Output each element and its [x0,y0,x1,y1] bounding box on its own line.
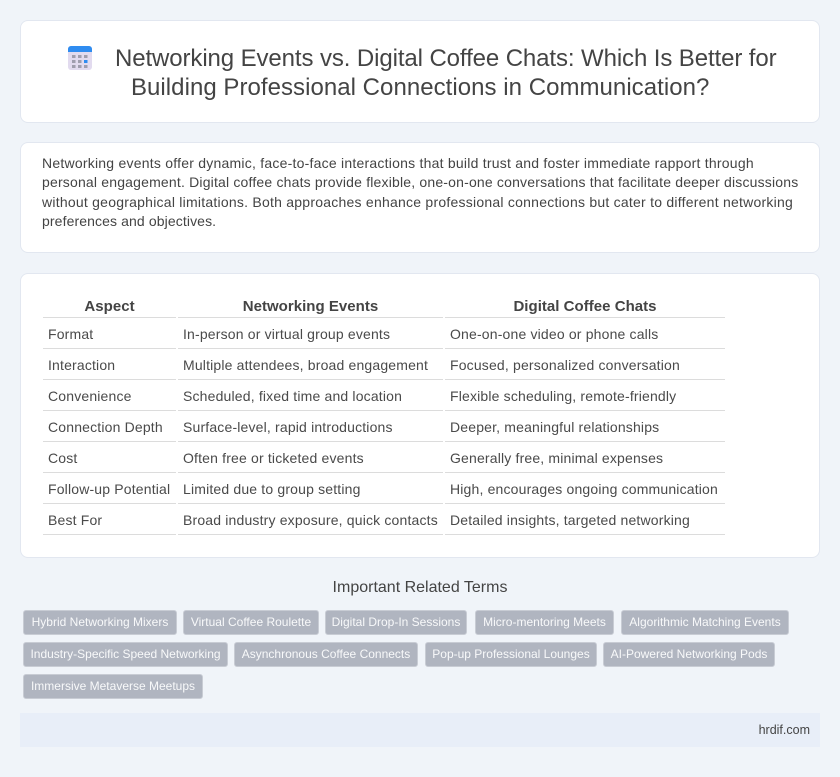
tags: related terms: AI-Powered Networking Pods [611,647,767,661]
title: Networking Events vs. Digital Coffee Chats: Which Is Better for [115,45,777,72]
row: follow-up potential: High, encourages ongoing communication [450,481,718,497]
panel: intro [20,142,820,253]
row: convenience: Scheduled, fixed time and location [183,388,402,404]
tags: related terms: Asynchronous Coffee Connects [242,647,410,661]
row: convenience: Flexible scheduling, remote-friendly [450,388,676,404]
table: comparison [43,298,725,535]
table header: Aspect [84,298,135,315]
row: interaction: Multiple attendees, broad engagement [183,357,428,373]
row: connection depth: Connection Depth [48,419,163,435]
row: format: One-on-one video or phone calls [450,326,658,342]
row: format: Format [48,326,93,342]
tags: related terms: Hybrid Networking Mixers [32,615,168,629]
tags: related terms: Digital Drop-In Sessions [332,615,460,629]
panel: comparison table [20,273,820,558]
row: cost: Cost [48,450,77,466]
table header: Networking Events [243,298,378,315]
text: intro paragraph: without geographical limitations. Both approaches enhance professional connections but cater to different networking [42,194,793,210]
tags: related terms: Immersive Metaverse Meetups [31,679,195,693]
footer [20,713,820,747]
row: cost [48,450,663,466]
tags: related terms [23,610,789,699]
row: best for: Detailed insights, targeted networking [450,512,690,528]
row: cost: Often free or ticketed events [183,450,364,466]
row: best for: Broad industry exposure, quick contacts [183,512,438,528]
text: intro paragraph: personal engagement. Digital coffee chats provide flexible, one-on-one conversations that facilitate deeper discussions [42,174,798,190]
heading: related terms: Important Related Terms [333,579,507,596]
row: interaction [48,357,680,373]
icon: calendar [68,46,92,70]
row: best for: Best For [48,512,102,528]
row: convenience [48,388,676,404]
footer: hrdif.com [759,723,810,737]
text: intro paragraph: preferences and objectives. [42,213,216,229]
row: follow-up potential: Limited due to group setting [183,481,361,497]
row: cost: Generally free, minimal expenses [450,450,663,466]
tags: related terms: Micro-mentoring Meets [483,615,606,629]
tags: related terms: Pop-up Professional Lounges [432,647,590,661]
panel: title header [20,20,820,123]
row: connection depth [48,419,659,435]
row: interaction: Focused, personalized conversation [450,357,680,373]
row: follow-up potential [48,481,718,497]
table header [84,298,657,315]
row: interaction: Interaction [48,357,115,373]
row: format [48,326,658,342]
text: intro paragraph [42,155,798,229]
text: intro paragraph: Networking events offer dynamic, face-to-face interactions that build trust and foster immediate rapport through [42,155,754,171]
tags: related terms: Algorithmic Matching Events [629,615,781,629]
row: best for [48,512,690,528]
title [115,45,777,101]
table header: Digital Coffee Chats [513,298,657,315]
title: Building Professional Connections in Communication? [131,74,709,101]
row: format: In-person or virtual group events [183,326,390,342]
tags: related terms: Virtual Coffee Roulette [191,615,311,629]
row: connection depth: Deeper, meaningful relationships [450,419,659,435]
row: connection depth: Surface-level, rapid introductions [183,419,393,435]
row: follow-up potential: Follow-up Potential [48,481,170,497]
tags: related terms: Industry-Specific Speed Networking [30,647,221,661]
row: convenience: Convenience [48,388,132,404]
